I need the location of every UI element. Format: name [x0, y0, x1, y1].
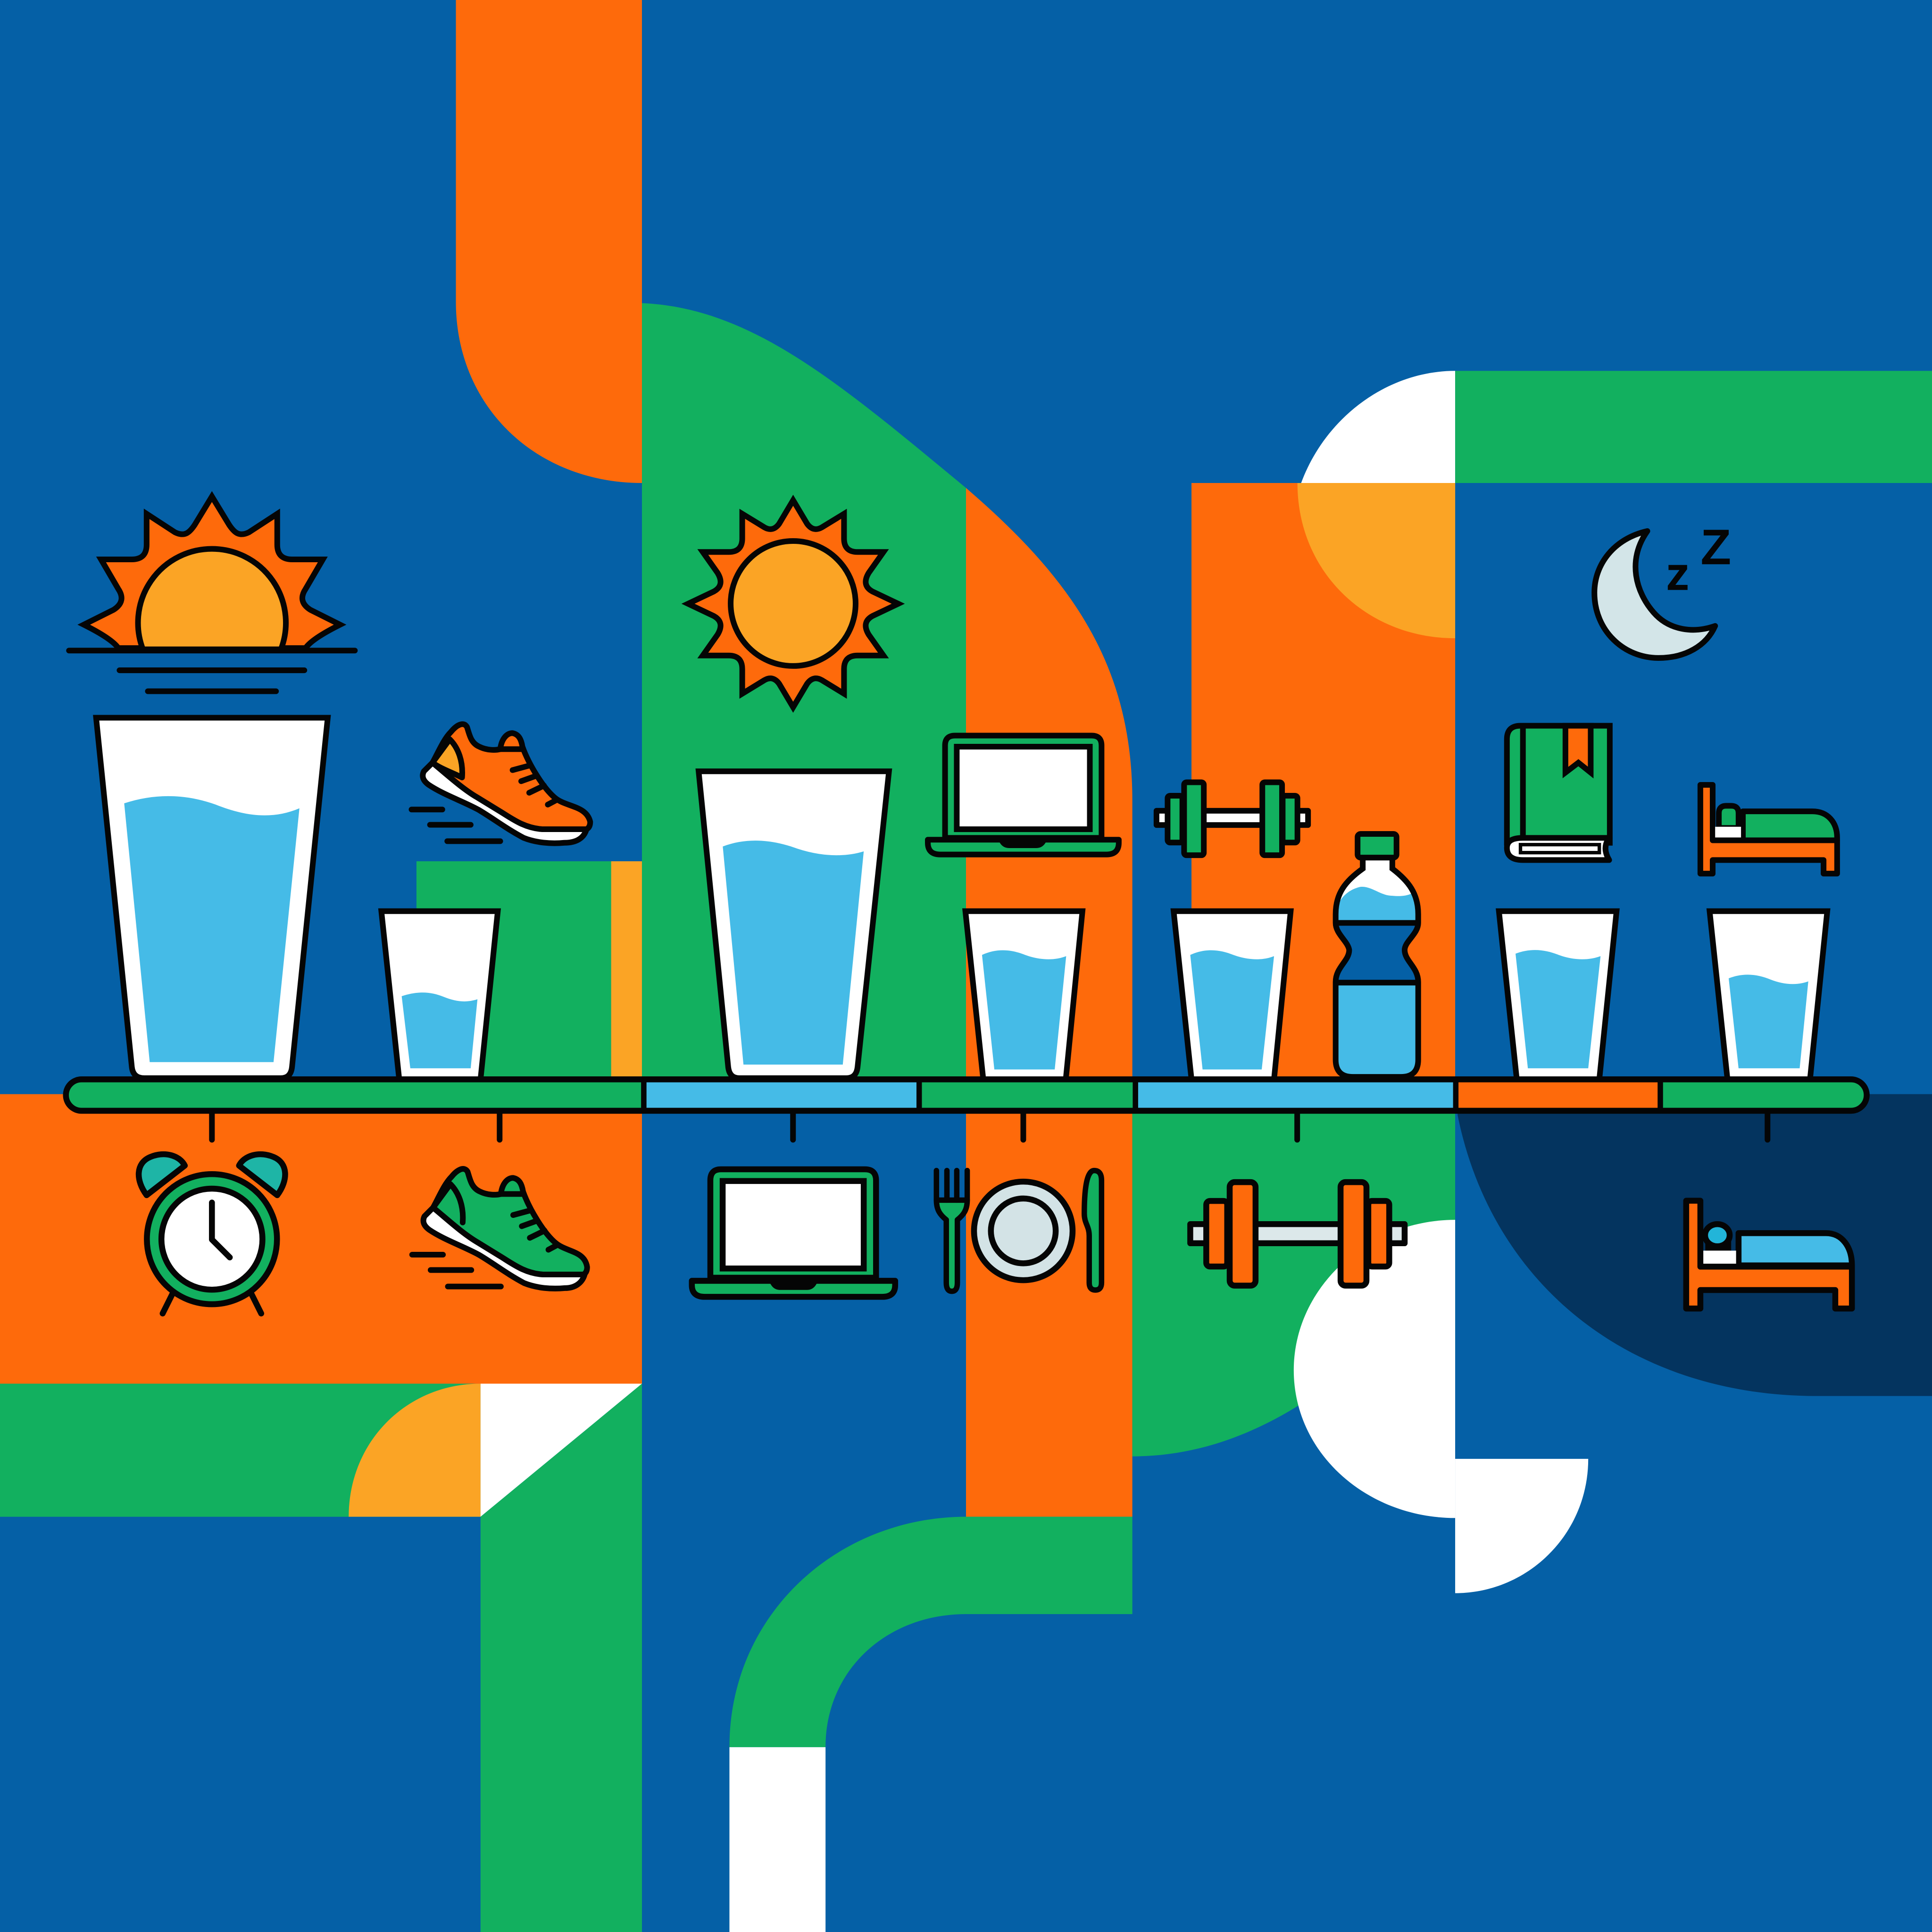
icon: green running shoe: [412, 1169, 587, 1289]
icon: sleep letters: Z: [1702, 521, 1730, 574]
glass 7: [1709, 911, 1827, 1079]
timeline tick marks: [212, 1113, 1767, 1140]
icon: plate: [974, 1182, 1073, 1280]
glass 3: [699, 771, 889, 1078]
icon: orange running shoe: [411, 724, 590, 843]
icon: small orange bed: [1700, 785, 1837, 874]
icon: midday sun: [688, 500, 898, 707]
icon: crescent moon: [1594, 531, 1715, 658]
icon: green book: [1507, 726, 1610, 860]
icon: sleep letters: z: [1667, 550, 1689, 599]
glass 1: [96, 718, 328, 1078]
icon: water bottle: [1336, 834, 1418, 1077]
icon: sleep letters: [1667, 521, 1730, 599]
icon: green laptop small: [928, 736, 1119, 855]
icon: green dumbbell small: [1157, 783, 1308, 855]
icon: orange dumbbell large: [1190, 1182, 1405, 1286]
glass 6: [1499, 911, 1616, 1079]
timeline shelf: [66, 1079, 1867, 1111]
icon: alarm clock: [139, 1154, 285, 1314]
icon: sunrise: [69, 497, 355, 691]
glass 5: [1174, 911, 1291, 1079]
glass 4: [966, 911, 1083, 1079]
icon: large orange and blue bed: [1686, 1201, 1852, 1308]
icon: knife: [1084, 1171, 1101, 1290]
glass 2: [381, 911, 498, 1079]
icon: fork: [936, 1171, 967, 1291]
icon: green laptop large: [692, 1169, 895, 1297]
